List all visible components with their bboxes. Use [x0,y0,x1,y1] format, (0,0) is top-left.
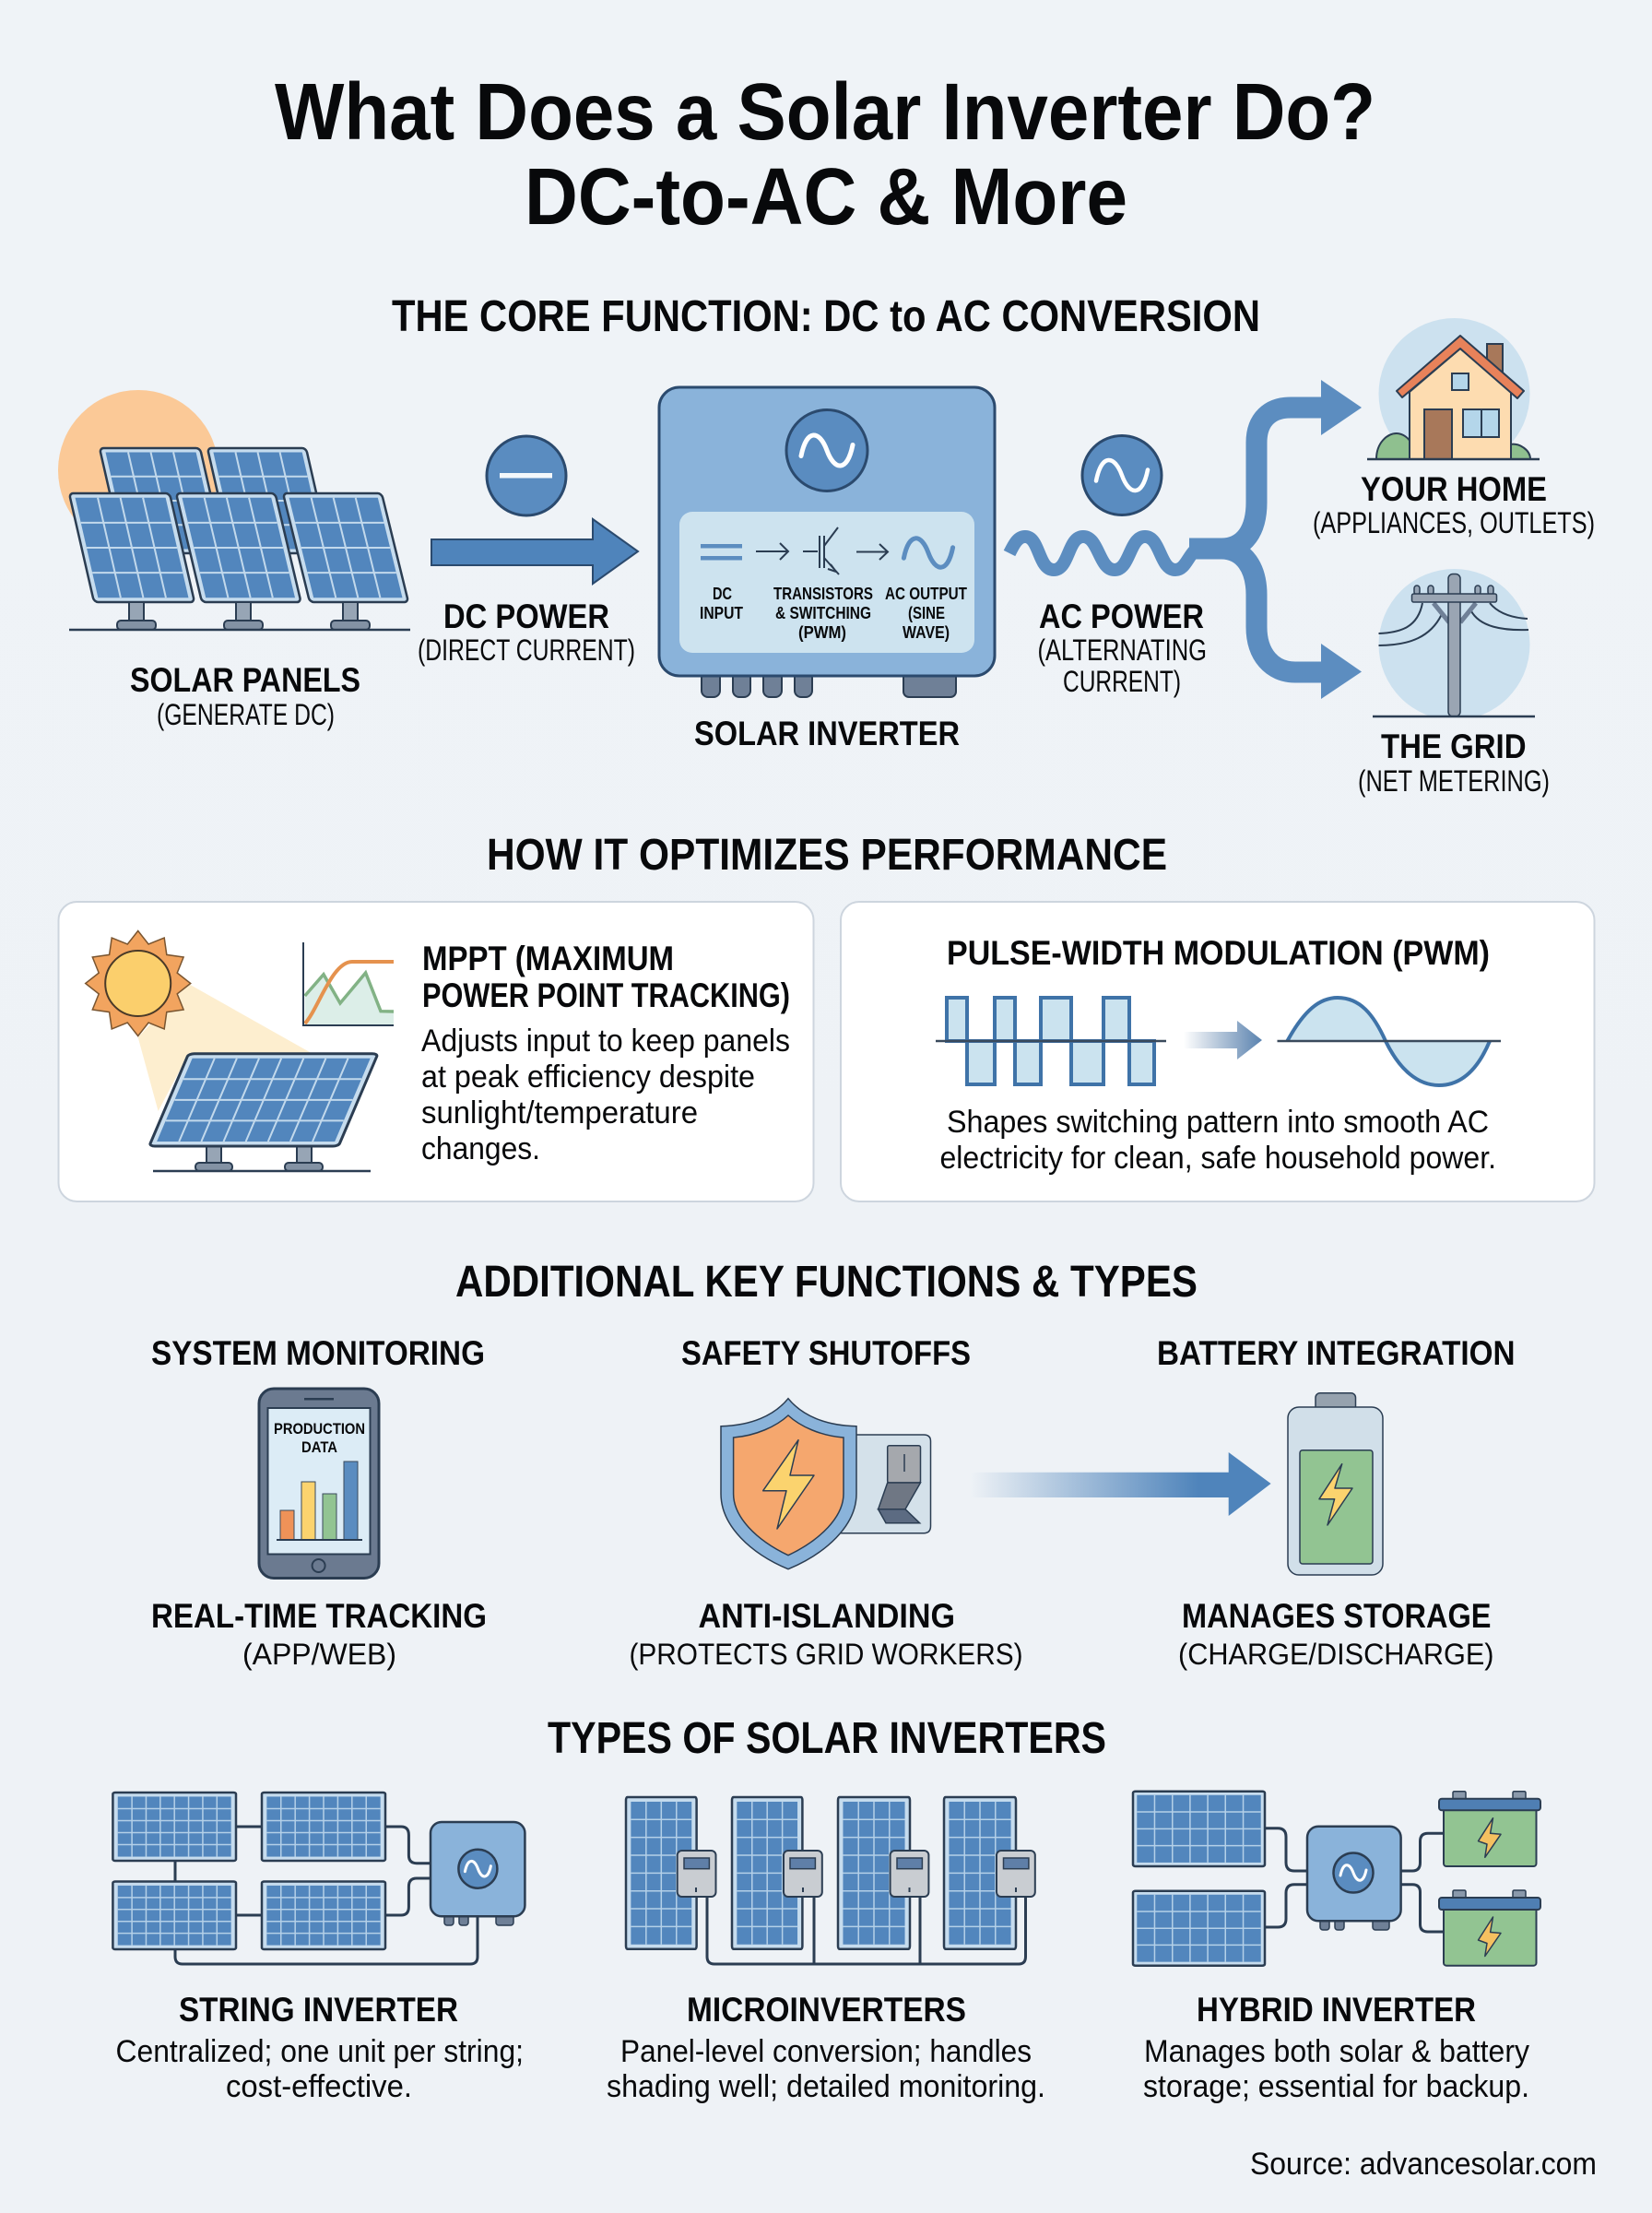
text: PWM description [940,1105,1496,1176]
heading: system monitoring: SYSTEM MONITORING [151,1334,485,1372]
title [275,67,1375,242]
icon: utility pole [1373,569,1535,720]
label: solar panels: (GENERATE DC) [157,698,335,731]
title: What Does a Solar Inverter Do? [275,67,1375,157]
text: MPPT heading: POWER POINT TRACKING) [422,976,790,1014]
text: PWM description: Shapes switching pattern into smooth AC [947,1105,1489,1140]
heading: safety shutoffs: SAFETY SHUTOFFS [681,1334,971,1372]
label: hybrid inverter: storage; essential for backup. [1143,2069,1529,2104]
chart: sine wave [1278,998,1501,1085]
label: solar inverter: SOLAR INVERTER [694,715,960,752]
icon: disconnect switch [834,1435,931,1533]
icon: sun [86,931,191,1036]
text: PWM heading: PULSE-WIDTH MODULATION (PWM) [947,934,1490,972]
inverter internals panel: (PWM) [798,623,846,642]
label: AC power [1038,598,1207,698]
inverter internals panel: & SWITCHING [775,604,871,622]
label: string inverter: STRING INVERTER [179,1991,458,2029]
icon: solar panels with sun [58,390,410,630]
panel: PWM [841,902,1595,1201]
label: AC power: CURRENT) [1063,665,1181,698]
arrow: AC wave splitting to home and grid [1009,380,1362,699]
label: string inverter: cost-effective. [226,2069,412,2104]
icon: shield with bolt [721,1399,856,1569]
inverter internals panel: DC [713,585,732,603]
label: microinverters: Panel-level conversion; handles [620,2034,1032,2069]
text: MPPT heading [422,940,790,1014]
heading: types of inverters: TYPES OF SOLAR INVERTERS [548,1714,1106,1763]
label: solar panels [130,661,360,731]
panel: MPPT [59,902,813,1201]
text: MPPT description: at peak efficiency despite [421,1059,755,1095]
icon: battery one [1439,1792,1540,1866]
inverter internals panel: INPUT [700,604,743,622]
label: your home [1313,470,1595,539]
label: string inverter: Centralized; one unit per string; [116,2034,524,2069]
inverter internals panel: WAVE) [903,623,950,642]
column: system monitoring [151,1334,487,1671]
title: DC-to-AC & More [525,152,1127,242]
label: anti-islanding: (PROTECTS GRID WORKERS) [629,1638,1023,1671]
label: manages storage: (CHARGE/DISCHARGE) [1178,1638,1493,1671]
icon: battery two [1439,1890,1540,1966]
column: hybrid inverter [1133,1792,1540,2104]
icon: microinverters diagram [626,1797,1035,1964]
text: MPPT heading: MPPT (MAXIMUM [422,940,674,977]
inverter internals panel: AC OUTPUT [885,585,967,603]
icon: phone with chart: PRODUCTION [274,1420,365,1438]
label: solar panels: SOLAR PANELS [130,661,360,699]
label: real-time tracking [151,1597,487,1671]
label: DC power: DC POWER [443,598,609,635]
label: real-time tracking: REAL-TIME TRACKING [151,1597,487,1635]
label: AC power: AC POWER [1039,598,1204,635]
text: MPPT description [421,1024,790,1166]
label: the grid [1358,728,1550,798]
icon: light beam [138,984,313,1111]
arrow: pulses to sine [1184,1021,1262,1059]
icon: hybrid inverter diagram [1133,1792,1540,1966]
heading: additional functions: ADDITIONAL KEY FUNCTIONS & TYPES [455,1258,1198,1307]
label: microinverters [607,1991,1045,2104]
label: hybrid inverter: HYBRID INVERTER [1197,1991,1476,2029]
icon: tilted solar panel [149,1054,378,1171]
label: the grid: (NET METERING) [1358,764,1550,798]
label: DC power: (DIRECT CURRENT) [418,633,635,667]
label: manages storage: MANAGES STORAGE [1182,1597,1492,1635]
column: safety shutoffs [629,1334,1023,1671]
icon: phone with chart [259,1389,379,1579]
label: DC power [418,598,635,667]
icon: house [1367,318,1540,469]
chart: power curve [303,942,394,1025]
label: hybrid inverter [1143,1991,1529,2104]
text: MPPT description: sunlight/temperature [421,1095,698,1130]
label: the grid: THE GRID [1381,728,1527,765]
label: anti-islanding [629,1597,1023,1671]
arrow: to battery [971,1452,1271,1516]
icon: phone with chart: DATA [301,1438,337,1456]
column: string inverter [112,1793,525,2104]
heading: optimizes performance: HOW IT OPTIMIZES PERFORMANCE [487,831,1167,880]
icon: battery [1288,1393,1383,1575]
label: real-time tracking: (APP/WEB) [242,1638,396,1671]
arrow: DC power [431,519,638,584]
label: microinverters: MICROINVERTERS [687,1991,966,2029]
inverter internals panel [679,512,974,653]
source credit: Source: advancesolar.com [1250,2147,1597,2182]
heading: core function: THE CORE FUNCTION: DC to AC CONVERSION [392,292,1260,341]
column: battery integration [1157,1334,1516,1671]
icon: DC symbol [487,436,566,515]
icon: string inverter diagram [112,1793,525,1964]
label: microinverters: shading well; detailed monitoring. [607,2069,1045,2104]
inverter internals panel: (SINE [908,604,945,622]
text: MPPT description: changes. [421,1131,540,1166]
label: hybrid inverter: Manages both solar & battery [1144,2034,1529,2069]
text: MPPT description: Adjusts input to keep panels [421,1024,790,1059]
icon: solar inverter [659,387,995,697]
label: manages storage [1178,1597,1493,1671]
column: microinverters [607,1797,1045,2104]
chart: square pulses [936,998,1166,1084]
text: PWM description: electricity for clean, safe household power. [940,1141,1496,1176]
label: your home: YOUR HOME [1361,470,1547,508]
heading: battery integration: BATTERY INTEGRATION [1157,1334,1516,1372]
label: AC power: (ALTERNATING [1038,633,1207,667]
label: anti-islanding: ANTI-ISLANDING [699,1597,955,1635]
label: string inverter [116,1991,524,2104]
inverter internals panel: TRANSISTORS [773,585,873,603]
icon: AC symbol [1082,435,1162,515]
